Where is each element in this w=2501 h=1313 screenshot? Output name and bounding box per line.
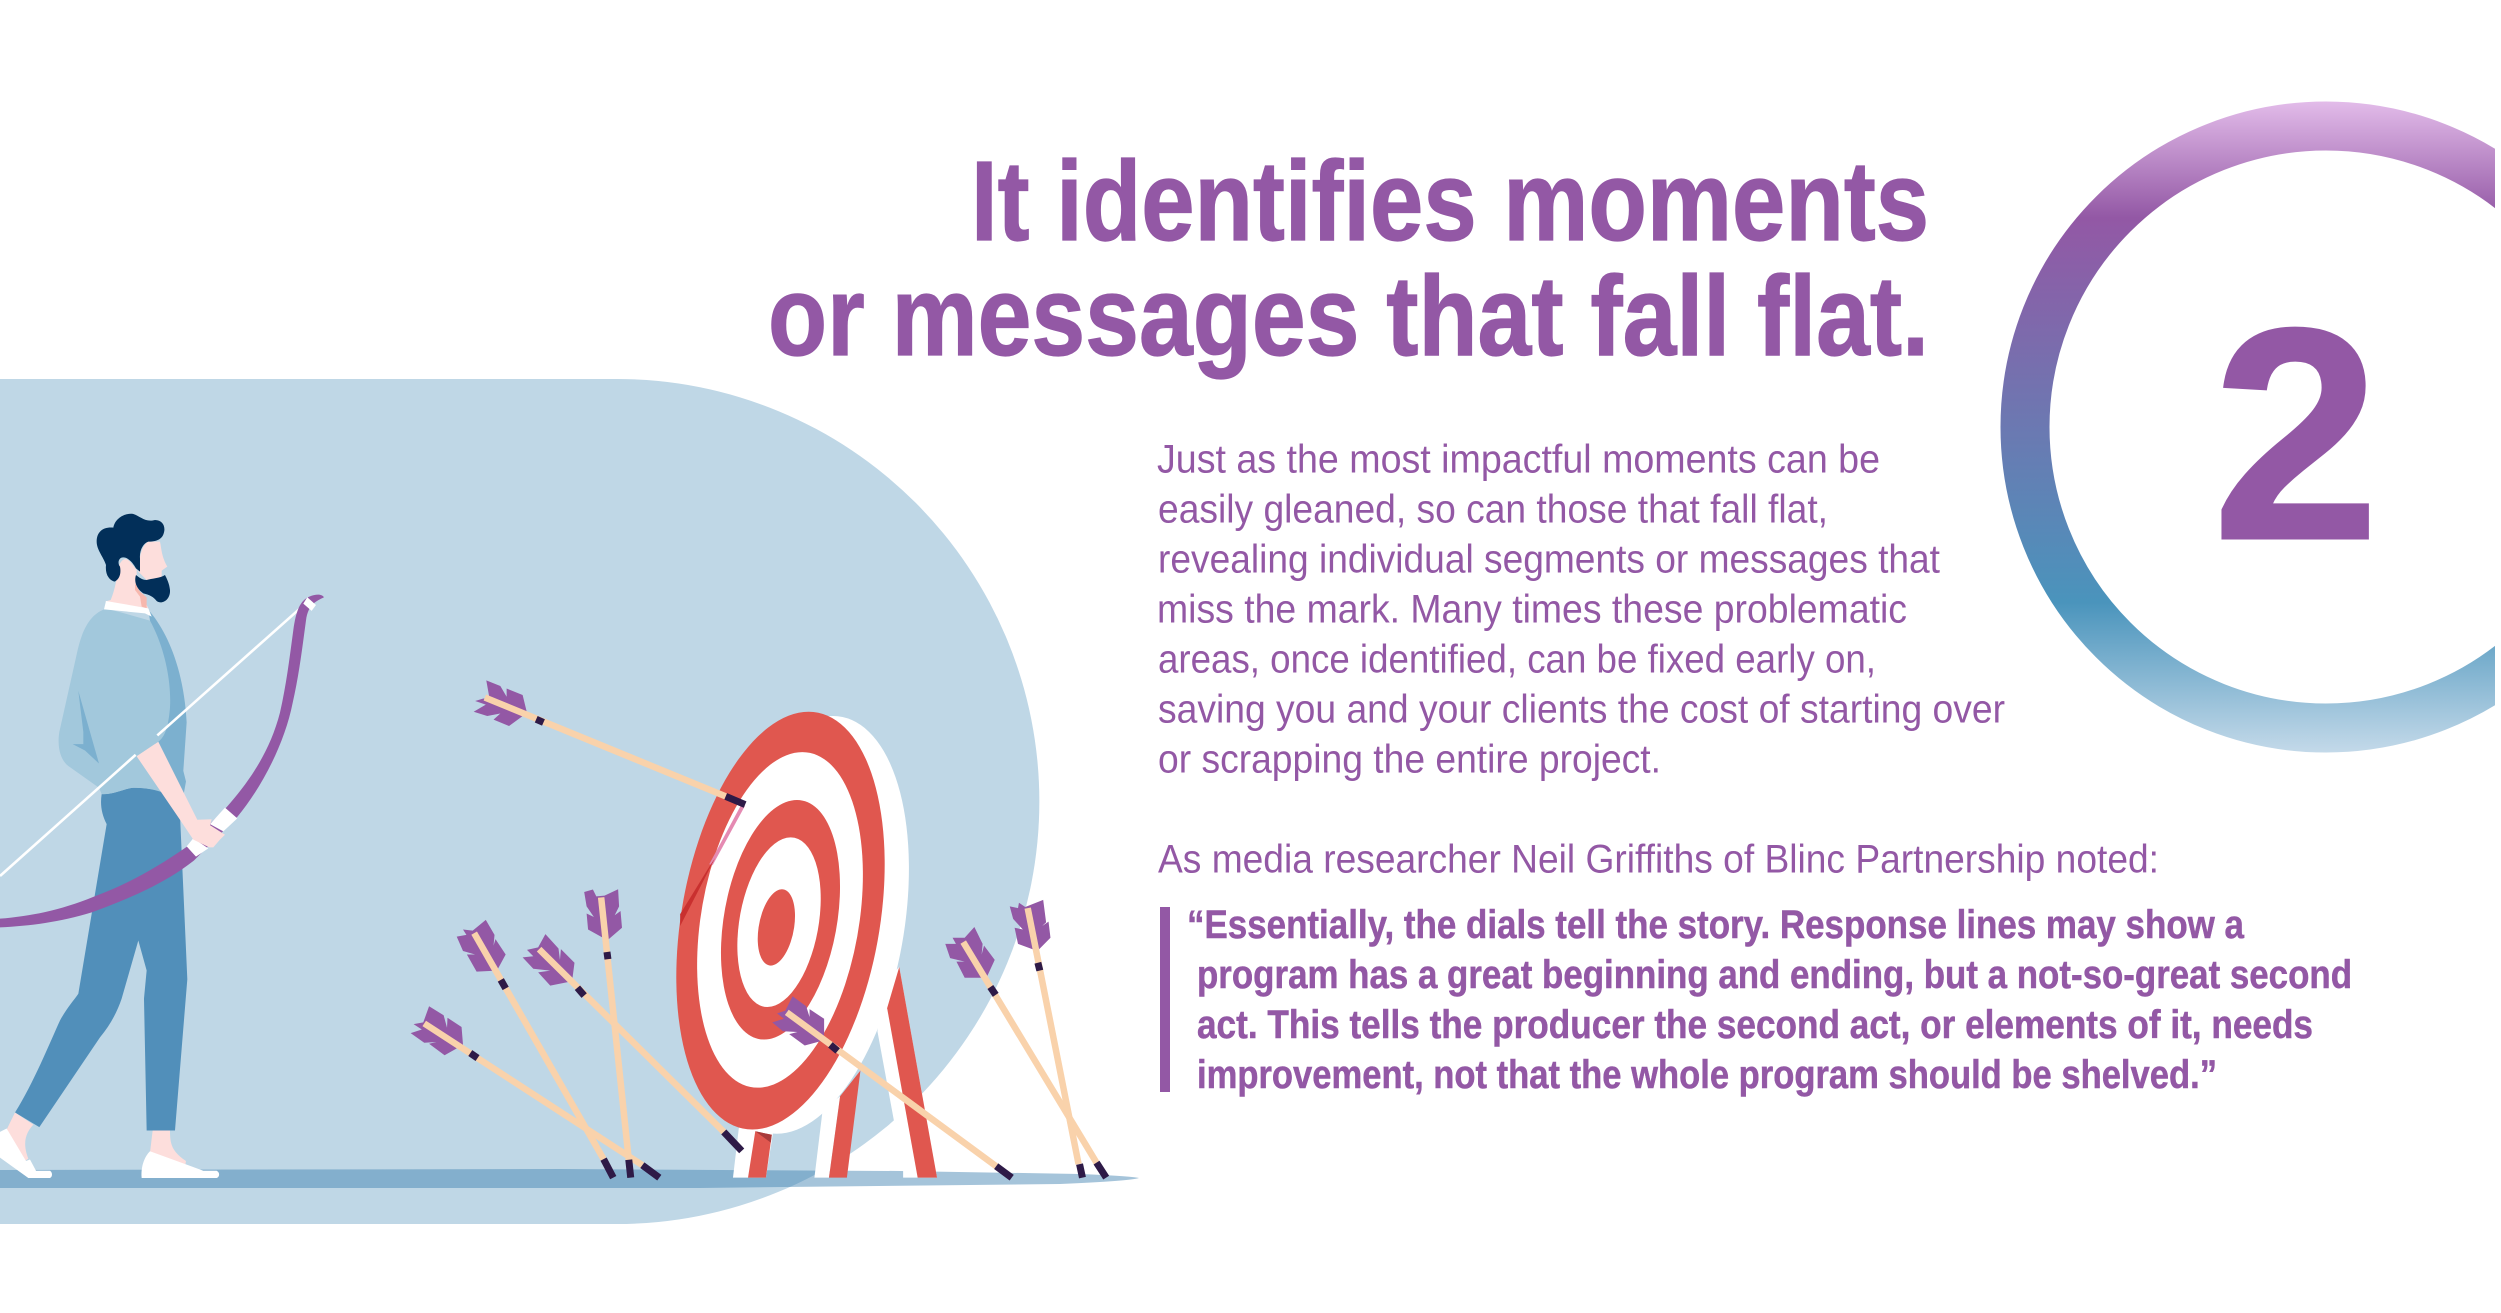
shirt fold	[73, 691, 99, 764]
hair	[97, 514, 164, 582]
shoes	[0, 1129, 219, 1178]
title	[768, 138, 1929, 379]
archer man	[0, 514, 324, 1178]
title: or messages that fall flat.	[768, 253, 1929, 379]
body paragraph: areas, once identified, can be fixed early on,	[1158, 638, 1876, 682]
quote text: “Essentially, the dials tell the story. Response lines may show a	[1187, 903, 2245, 947]
quote text	[1187, 903, 2352, 1097]
arrow: far left	[411, 1006, 659, 1178]
face	[138, 542, 167, 580]
body paragraph: miss the mark. Many times these problematic	[1157, 588, 1907, 632]
body paragraph: or scrapping the entire project.	[1158, 738, 1661, 782]
target with stand	[652, 712, 937, 1178]
shirt	[59, 608, 170, 794]
arrow: stuck in target	[474, 680, 745, 805]
trousers	[15, 788, 187, 1130]
attribution line: As media researcher Neil Griffiths of Blinc Partnership noted:	[1158, 838, 2159, 882]
arrow: upright left	[584, 889, 631, 1178]
target rings	[652, 712, 909, 1129]
arrows	[411, 680, 1106, 1178]
bow wraps	[187, 597, 316, 857]
arm and hand	[137, 742, 225, 847]
bow string	[0, 604, 305, 876]
shirt back panel	[148, 610, 187, 814]
collar	[104, 601, 152, 617]
body paragraph: Just as the most impactful moments can be	[1157, 438, 1880, 482]
neck shadow	[135, 583, 147, 608]
target back edge	[676, 716, 933, 1134]
feet	[7, 1113, 186, 1167]
body paragraph	[1157, 438, 2005, 782]
neck	[105, 559, 148, 608]
body paragraph: saving you and your clients the cost of starting over	[1158, 688, 2005, 732]
quote bar	[1160, 907, 1170, 1092]
quote text: act. This tells the producer the second act, or elements of it, needs	[1197, 1003, 2313, 1047]
arrow: left two	[457, 920, 613, 1178]
title: It identifies moments	[971, 138, 1929, 264]
arrow: right two	[1010, 900, 1082, 1178]
arrow: in front of target	[772, 996, 1012, 1178]
body paragraph: easily gleaned, so can those that fall flat,	[1158, 488, 1828, 532]
quote text: improvement, not that the whole program should be shelved.”	[1197, 1053, 2217, 1097]
arrow: left three	[523, 934, 742, 1151]
beard	[135, 575, 170, 602]
bow	[0, 595, 324, 927]
target stand legs	[733, 967, 937, 1178]
quote text: program has a great beginning and ending, but a not-so-great second	[1197, 953, 2352, 997]
body	[0, 595, 324, 1178]
number 2: 2	[2212, 266, 2380, 602]
body paragraph: revealing individual segments or messages that	[1158, 538, 1940, 582]
ground shadow	[0, 1169, 1139, 1188]
background blob panel	[0, 379, 1039, 1224]
number ring	[2025, 126, 2501, 728]
head	[97, 514, 170, 617]
arrow: right one	[945, 927, 1106, 1178]
